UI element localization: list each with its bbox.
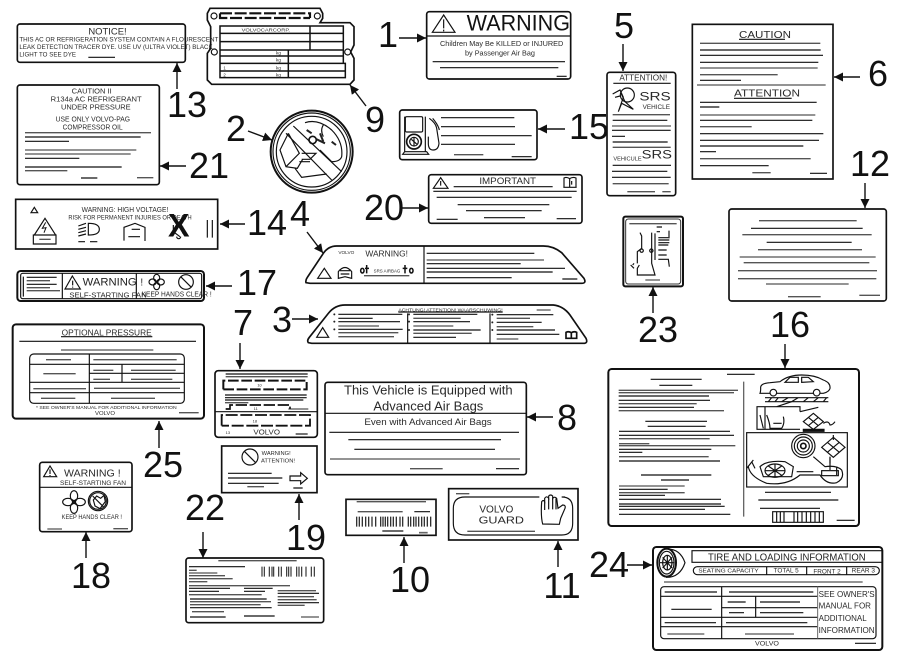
label 3: multilingual wedge: ACHTUNG! ATTENTION! WAARSCHUWING! xyxy=(398,307,503,313)
label 11: volvo guard xyxy=(449,489,578,540)
label 9: vehicle data plate: 1 xyxy=(223,65,226,70)
arrow 24 xyxy=(627,564,652,566)
icon: person with air bag xyxy=(613,88,634,112)
label 7: dashed data label: 13 xyxy=(226,430,231,435)
label 25: optional pressure: OPTIONAL PRESSURE xyxy=(62,328,152,338)
callout 10 number: 10 xyxy=(390,559,430,600)
label 24: tire and loading information: FRONT 2 xyxy=(813,569,841,575)
label 24: tire and loading information: TIRE AND LOADING INFORMATION xyxy=(708,553,866,564)
label 18: self-starting fan warning: WARNING ! xyxy=(64,468,121,479)
label 5: SRS attention xyxy=(607,72,676,196)
label 4: warning wedge: SRS AIRBAG xyxy=(374,268,401,273)
arrow 7 xyxy=(239,343,241,369)
barcode xyxy=(357,517,431,527)
icon: fan xyxy=(63,491,85,513)
label 24: tire and loading information: TOTAL 5 xyxy=(774,569,799,575)
label 9: vehicle data plate: 2 xyxy=(223,72,226,77)
label 7: dashed data label: 18 xyxy=(253,419,258,424)
callout 20 number: 20 xyxy=(364,187,404,228)
label 6: caution attention sheet: ATTENTION xyxy=(734,89,800,100)
label 23: square pictogram xyxy=(623,217,683,286)
icon: seat xyxy=(338,267,352,278)
icon: electrical hazard xyxy=(33,218,56,244)
label 11: volvo guard: VOLVO xyxy=(479,504,514,515)
label 12: text sticker xyxy=(729,209,886,301)
callout 5 number: 5 xyxy=(614,5,634,46)
label 9: vehicle data plate: kg xyxy=(276,58,281,63)
label 24: tire and loading information: MANUAL FOR xyxy=(819,601,871,611)
callout 17 number: 17 xyxy=(237,262,277,303)
label 8: advanced air bags: Advanced Air Bags xyxy=(373,400,483,414)
icon: car hood xyxy=(124,223,145,241)
callout 19 number: 19 xyxy=(286,517,326,558)
arrow 16 xyxy=(784,344,786,368)
label 19: warning attention arrow xyxy=(222,446,317,493)
label 21: refrigerant caution: UNDER PRESSURE xyxy=(61,102,131,111)
callout 3 number: 3 xyxy=(272,299,292,340)
label 7: dashed data label: 10 xyxy=(257,382,263,387)
label 6: caution attention sheet xyxy=(692,24,833,179)
label 18: self-starting fan warning xyxy=(40,462,132,532)
label 17: self-starting fan strip: WARNING xyxy=(83,277,137,289)
label 10: barcode label xyxy=(346,499,436,535)
barcode xyxy=(262,567,314,577)
icon: prohibited xyxy=(179,275,193,289)
callout 7 number: 7 xyxy=(233,302,253,343)
label 7: dashed data label: VOLVO xyxy=(253,428,280,437)
label 4: warning wedge: WARNING! xyxy=(365,249,408,259)
label 8: advanced air bags: Even with Advanced Air Bags xyxy=(364,417,492,427)
arrow 13 xyxy=(176,63,178,89)
label 17: self-starting fan strip xyxy=(17,271,212,301)
label 21: refrigerant caution xyxy=(17,85,159,185)
label 9: vehicle data plate xyxy=(207,8,354,84)
label 1: passenger air bag warning xyxy=(427,11,571,79)
label 9: vehicle data plate: kg xyxy=(276,50,281,55)
label 13: notice: THIS AC OR REFRIGERATION SYSTEM CONTAIN A FLOURESCENT xyxy=(19,36,218,43)
callout 22 number: 22 xyxy=(185,487,225,528)
label 24: tire and loading information: INFORMATION xyxy=(819,625,875,635)
arrow 18 xyxy=(85,532,87,558)
label 7: dashed data label xyxy=(215,371,317,437)
label 21: refrigerant caution: COMPRESSOR OIL xyxy=(63,122,123,131)
callout 12 number: 12 xyxy=(850,143,890,184)
arrow 25 xyxy=(158,421,160,448)
label 5: SRS attention: SRS xyxy=(639,90,671,104)
label 13: notice: LIGHT TO SEE DYE xyxy=(19,51,77,58)
icon: jack detail xyxy=(757,402,835,431)
label 17: self-starting fan strip: ! xyxy=(140,278,143,289)
callout 15 number: 15 xyxy=(569,106,609,147)
label 8: advanced air bags: This Vehicle is Equipped with xyxy=(344,384,513,398)
arrow 2 xyxy=(248,131,272,140)
arrow 22 xyxy=(202,532,204,558)
arrow 20 xyxy=(402,207,428,209)
label 17: self-starting fan strip: SELF-STARTING FAN xyxy=(69,291,147,300)
arrow 4 xyxy=(307,232,323,253)
label 1: passenger air bag warning: WARNING xyxy=(467,11,570,36)
label 13: notice: LEAK DETECTION TRACER DYE. USE UV (ULTRA VIOLET) BLACK xyxy=(19,44,213,51)
callout 9 number: 9 xyxy=(365,99,385,140)
icon: headlight xyxy=(78,223,99,242)
icon: crossed out tool: X xyxy=(168,208,190,244)
label 25: optional pressure xyxy=(13,324,204,419)
label 3: multilingual wedge xyxy=(308,305,587,343)
icon: tire xyxy=(657,549,685,577)
label 14: high voltage warning: RISK FOR PERMANENT INJURIES OR DEATH xyxy=(68,216,192,222)
callout 18 number: 18 xyxy=(71,555,111,596)
callout 21 number: 21 xyxy=(189,145,229,186)
arrow 10 xyxy=(403,537,405,563)
callout 11 number: 11 xyxy=(543,565,581,606)
label 9: vehicle data plate: kg xyxy=(276,72,281,77)
label 20: important: IMPORTANT xyxy=(479,176,537,186)
callout 13 number: 13 xyxy=(167,84,207,125)
callout 24 number: 24 xyxy=(589,544,629,585)
label 18: self-starting fan warning: KEEP HANDS CLEAR ! xyxy=(62,515,122,521)
label 24: tire and loading information: SEATING CAPACITY xyxy=(698,569,759,575)
label 5: SRS attention: SRS xyxy=(642,148,672,162)
callout 16 number: 16 xyxy=(770,304,810,345)
label 5: SRS attention: VEHICULE xyxy=(613,156,642,162)
label 21: refrigerant caution: R134a AC REFRIGERANT xyxy=(51,95,142,104)
label 24: tire and loading information: REAR 3 xyxy=(852,569,876,575)
icon: outline arrow xyxy=(290,473,307,484)
icon: people xyxy=(361,265,413,273)
icon: no hands xyxy=(88,491,108,511)
callout 6 number: 6 xyxy=(868,53,888,94)
icon: fuel pump xyxy=(403,117,439,154)
label 6: caution attention sheet: CAUTION xyxy=(739,30,791,41)
text columns xyxy=(619,374,755,514)
label 1: passenger air bag warning: Children May Be KILLED or INJURED xyxy=(440,39,563,48)
arrow 6 xyxy=(834,76,860,78)
label 18: self-starting fan warning: SELF-STARTING FAN xyxy=(60,480,126,487)
arrow 17 xyxy=(206,285,232,287)
label 16: jacking instructions xyxy=(608,369,859,526)
arrow 9 xyxy=(350,85,366,106)
label 19: warning attention arrow: ATTENTION! xyxy=(261,459,295,465)
label 13: notice xyxy=(17,24,218,62)
label 5: SRS attention: ATTENTION! xyxy=(619,73,667,82)
callout 2 number: 2 xyxy=(226,108,246,149)
callout 4 number: 4 xyxy=(290,193,310,234)
icon: book xyxy=(566,332,577,338)
label 17: self-starting fan strip: KEEP HANDS CLEAR ! xyxy=(142,292,212,299)
arrow 1 xyxy=(399,37,426,39)
label 1: passenger air bag warning: by Passenger Air Bag xyxy=(465,49,535,58)
arrow 19 xyxy=(298,494,300,520)
label 25: optional pressure: VOLVO xyxy=(95,411,116,417)
arrow 11 xyxy=(557,541,559,567)
icon: prohibited xyxy=(242,449,258,465)
label 24: tire and loading information: ADDITIONAL xyxy=(819,613,867,623)
label 4: warning wedge: VOLVO xyxy=(338,250,355,255)
label 22: barcode data label xyxy=(186,558,324,623)
callout 8 number: 8 xyxy=(557,397,577,438)
label 24: tire and loading information: VOLVO xyxy=(755,640,779,647)
label 24: tire and loading information xyxy=(653,547,882,650)
label 9: vehicle data plate: VOLVOCARCORP. xyxy=(242,27,290,33)
label 4: warning wedge xyxy=(306,246,585,283)
arrow 12 xyxy=(864,183,866,208)
label 15: fuel pump label xyxy=(400,110,537,160)
label 13: notice: NOTICE! xyxy=(88,26,127,36)
label 8: advanced air bags xyxy=(325,382,526,475)
label 25: optional pressure: * SEE OWNER'S MANUAL FOR ADDITIONAL INFORMATION xyxy=(36,405,177,411)
label 11: volvo guard: GUARD xyxy=(479,516,524,527)
arrow 15 xyxy=(538,128,565,130)
callout 25 number: 25 xyxy=(143,444,183,485)
label 20: important xyxy=(429,175,582,223)
arrow 23 xyxy=(652,287,654,313)
callout 23 number: 23 xyxy=(638,309,678,350)
label 7: dashed data label: 11 xyxy=(254,406,259,411)
label 5: SRS attention: VEHICLE xyxy=(643,104,670,111)
label 19: warning attention arrow: WARNING! xyxy=(262,451,291,457)
label 24: tire and loading information: SEE OWNER'S xyxy=(819,589,875,599)
icon: fan xyxy=(149,274,164,290)
spare tire stowage xyxy=(747,433,847,487)
arrow 5 xyxy=(622,44,624,71)
label 21: refrigerant caution: USE ONLY VOLVO-PAG xyxy=(56,115,130,124)
label 9: vehicle data plate: kg xyxy=(276,65,281,70)
arrow 21 xyxy=(160,165,186,167)
callout 1 number: 1 xyxy=(378,14,398,55)
callout 14 number: 14 xyxy=(247,202,287,243)
label 21: refrigerant caution: CAUTION II xyxy=(72,87,112,96)
arrow 3 xyxy=(292,318,318,320)
icon: book xyxy=(563,177,577,187)
label 14: high voltage warning xyxy=(16,199,218,249)
label 2: round air bag pictogram xyxy=(271,111,353,193)
arrow 14 xyxy=(220,223,245,225)
barcode xyxy=(773,512,823,522)
icon: car on ramp xyxy=(760,375,830,402)
arrow 8 xyxy=(527,416,553,418)
label 14: high voltage warning: WARNING: HIGH VOLTAGE! xyxy=(82,207,168,214)
icon: hand xyxy=(541,495,565,524)
